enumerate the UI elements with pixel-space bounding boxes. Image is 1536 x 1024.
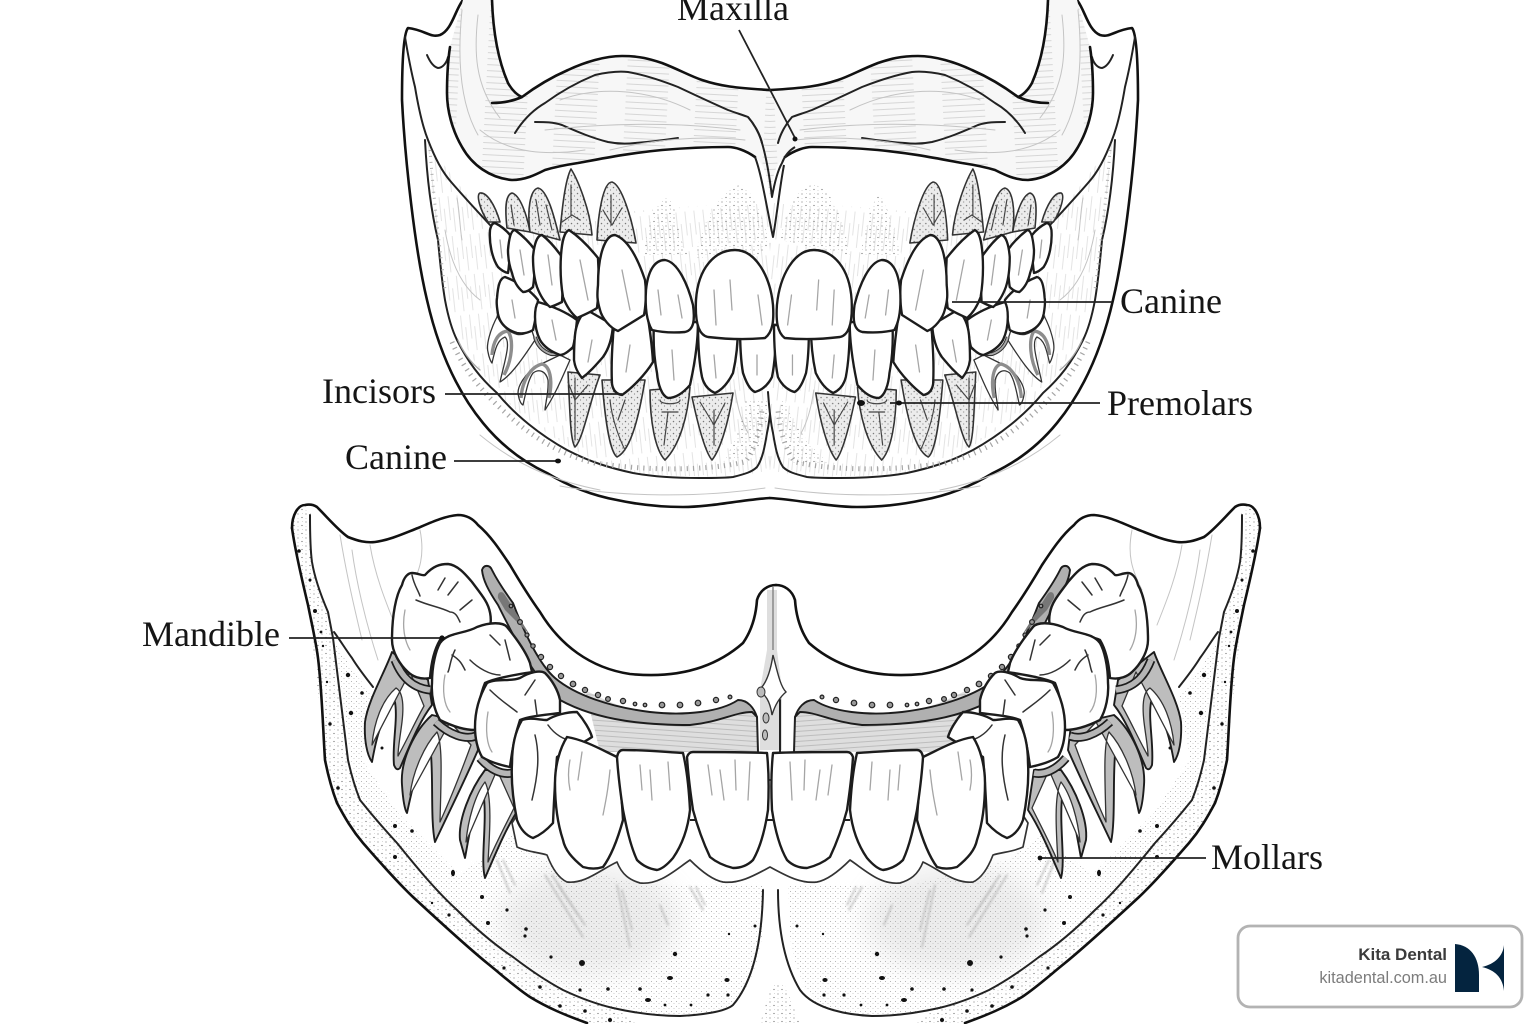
label: Mandible: Mandible (142, 614, 280, 654)
gum tissue hatching (425, 140, 770, 476)
upper jaw bone, right half (768, 0, 1138, 507)
dotted canal (509, 604, 732, 708)
label: Mollars (1038, 837, 1323, 877)
brand name: Kita Dental (1358, 945, 1447, 964)
upper tooth roots, left (478, 169, 636, 243)
lower row of teeth in upper view, left (497, 277, 776, 398)
lower teeth roots, left (365, 652, 518, 878)
label: Mandible (142, 614, 445, 654)
lower gum gap line (690, 819, 850, 821)
mandible bone, left half (292, 505, 776, 1024)
illustration: upper jaw (maxilla) (402, 0, 1138, 507)
upper teeth, left (490, 223, 773, 339)
upper jaw bone, left half (402, 0, 772, 507)
label: Canine upper right: Canine (1120, 281, 1222, 321)
card background (1238, 926, 1522, 1007)
soft shading on mandible body (500, 865, 1045, 975)
lower teeth, left (392, 564, 769, 870)
lower row of teeth in upper view, right (774, 277, 1045, 398)
mandibular symphysis (680, 587, 872, 1024)
alveolar stipple between roots (645, 185, 902, 465)
palate band fill (447, 0, 770, 197)
lower teeth, right (771, 564, 1148, 870)
brand website: kitadental.com.au (1319, 969, 1447, 987)
label: Canine lower left (345, 437, 561, 477)
illustration: lower jaw (mandible) (292, 505, 1260, 1024)
bone pores (297, 549, 756, 1022)
label: Incisors: Incisors (322, 371, 436, 411)
brand logo (1455, 944, 1504, 992)
label: Canine lower left: Canine (345, 437, 447, 477)
palatal frenum (748, 117, 795, 237)
label: Maxilla (677, 0, 798, 142)
label: Premolars (857, 383, 1253, 423)
label: Premolars: Premolars (1107, 383, 1253, 423)
lower tooth roots shown in upper jaw, left (487, 315, 748, 460)
floor of mouth band (585, 690, 757, 752)
mandible bone, right half (776, 505, 1260, 1024)
gum line under teeth (512, 780, 1028, 883)
lower tooth roots shown in upper jaw, right (801, 315, 1054, 460)
bone streak shading (497, 860, 705, 947)
stippled body (334, 640, 764, 1015)
stippled rim band (292, 505, 640, 1024)
upper tooth roots, right (910, 169, 1063, 243)
lower teeth roots, right (1028, 652, 1181, 878)
brand card (1238, 926, 1522, 1007)
central mandible lobes (680, 890, 763, 1016)
label: Mollars: Mollars (1211, 837, 1323, 877)
upper teeth, right (777, 223, 1052, 339)
